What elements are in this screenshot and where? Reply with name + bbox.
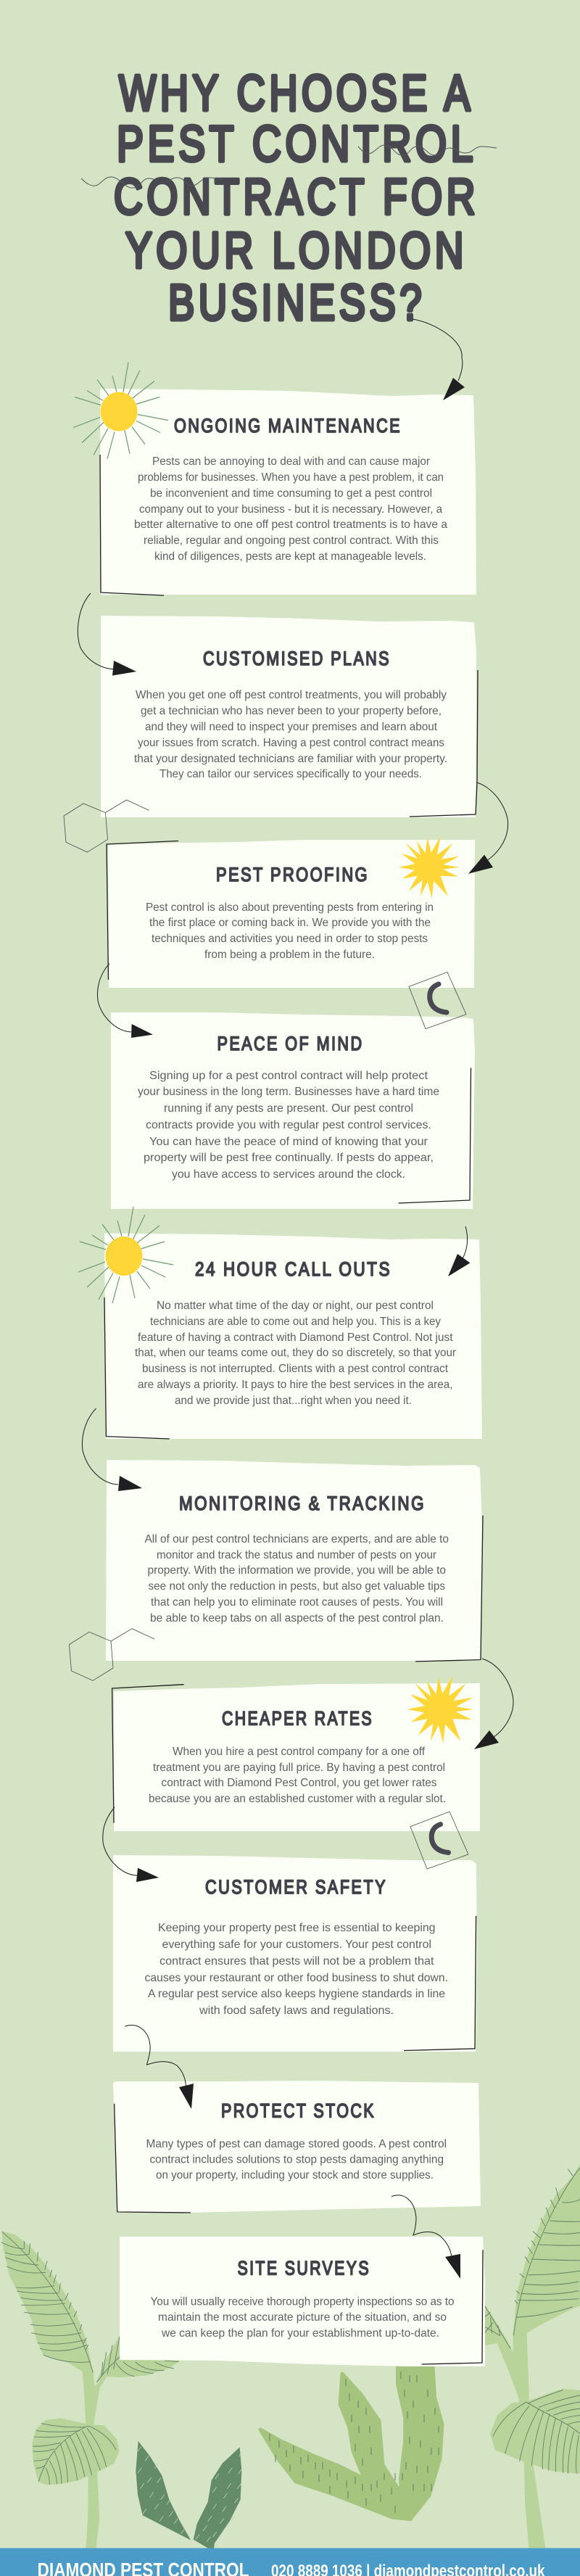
text: customised plans: and they will need to inspect your premises and learn about [145,721,438,733]
icon: tilted square top [409,972,466,1029]
text: 24 hour call outs: business is not interrupted. Clients with a pest control contract [142,1363,449,1375]
heading: cheaper rates: CHEAPER RATES [222,1707,373,1729]
text: pest proofing [146,901,434,961]
icon: sun top [73,363,168,458]
heading: site surveys: SITE SURVEYS [238,2257,370,2279]
text: pest proofing: Pest control is also about preventing pests from entering in [146,901,434,914]
squiggle: title upper [358,145,497,155]
icon: tilted square second [410,1812,468,1869]
arrow: safety to stock [125,2025,194,2109]
icon: starburst second [407,1675,473,1743]
plant: middle light green branch [260,2366,442,2519]
text: protect stock [146,2138,447,2181]
title: PEST CONTROL [117,115,477,172]
text: monitoring and tracking: monitor and track the status and number of pests on your [157,1549,437,1561]
text: peace of mind: You can have the peace of mind of knowing that your [149,1136,428,1148]
text: customised plans [134,689,447,780]
text: customer safety [145,1922,448,2017]
heading: customised plans: CUSTOMISED PLANS [203,648,391,669]
text: protect stock: Many types of pest can damage stored goods. A pest control [146,2138,447,2150]
text: site surveys: we can keep the plan for your establishment up-to-date. [161,2327,439,2340]
text: peace of mind: you have access to services around the clock. [172,1168,405,1181]
panel: customer safety [113,1855,477,2052]
heading: ongoing maintenance: ONGOING MAINTENANCE [174,415,402,437]
arrow: maintenance to plans [78,593,136,676]
text: monitoring and tracking [145,1533,449,1625]
title: WHY CHOOSE A [119,65,474,121]
text: protect stock: contract includes solutions to stop pests damaging anything [149,2154,444,2166]
plant: dark green leaves [136,2441,241,2548]
text: cheaper rates: treatment you are paying full price. By having a pest control [153,1762,445,1774]
text: customised plans: They can tailor our services specifically to your needs. [160,768,422,780]
title: CONTRACT FOR [114,168,479,225]
text: customer safety: causes your restaurant or other food business to shut down. [145,1972,448,1984]
icon: sun second [78,1207,173,1303]
panel: pest proofing [107,840,475,988]
text: customer safety: contract ensures that pests will not be a problem that [160,1955,434,1968]
arrow: call outs to monitoring [82,1408,142,1491]
squiggle: title lower [81,177,222,188]
text: ongoing maintenance [134,455,447,563]
text: monitoring and tracking: property. With the information we provide, you will be able to [148,1564,446,1577]
text: customised plans: When you get one off pest control treatments, you will probably [136,689,447,701]
text: peace of mind: contracts provide you with regular pest control services. [146,1119,431,1131]
panel: protect stock [113,2081,481,2213]
arrow: monitoring to cheaper rates [474,1659,513,1749]
text: 24 hour call outs: and we provide just that...right when you need it. [175,1395,412,1407]
text: peace of mind: Signing up for a pest control contract will help protect [149,1070,428,1082]
text: cheaper rates: because you are an established customer with a regular slot. [149,1793,446,1805]
heading: customer safety: CUSTOMER SAFETY [205,1876,387,1898]
text: customer safety: with food safety laws and regulations. [199,2005,394,2017]
text: peace of mind [138,1070,439,1181]
icon: hexagon top [64,800,149,852]
text: ongoing maintenance: Pests can be annoying to deal with and can cause major [152,455,431,468]
text: pest proofing: from being a problem in the future. [204,949,375,961]
heading: peace of mind: PEACE OF MIND [218,1033,364,1054]
text: monitoring and tracking: that can help you to eliminate root causes of pests. You will [151,1596,443,1609]
text: 24 hour call outs: feature of having a contract with Diamond Pest Control. Not just [138,1332,453,1344]
text: ongoing maintenance: reliable, regular and ongoing pest control contract. With this [144,534,439,547]
text: ongoing maintenance: problems for businesses. When you have a pest problem, it can [138,471,444,484]
text: customer safety: A regular pest service also keeps hygiene standards in line [148,1988,445,2000]
text: site surveys [151,2296,455,2340]
arrow: stock to surveys [392,2195,460,2279]
panel: peace of mind [111,1012,475,1209]
text: customised plans: get a technician who has never been to your property before, [141,705,442,717]
plant: right with striped leaves [484,2165,580,2548]
text: cheaper rates [149,1746,446,1805]
text: customer safety: Keeping your property pest free is essential to keeping [158,1922,435,1934]
plant: left with striped leaves [1,2232,180,2548]
text: site surveys: You will usually receive thorough property inspections so as to [151,2296,455,2308]
text: cheaper rates: When you hire a pest control company for a one off [173,1746,426,1758]
arrow: plans to proofing [468,783,508,874]
text: site surveys: maintain the most accurate picture of the situation, and so [158,2311,447,2324]
title: YOUR LONDON [125,222,468,278]
text: ongoing maintenance: kind of diligences, pests are kept at manageable levels. [154,550,426,563]
title [114,65,479,331]
title: BUSINESS? [168,274,426,331]
text: protect stock: on your property, including your stock and store supplies. [156,2169,434,2181]
text: monitoring and tracking: see not only the reduction in pests, but also get valuable tips [148,1580,445,1593]
arrow: cheaper rates to safety [103,1807,159,1882]
panel: customised plans [101,616,478,817]
text: pest proofing: the first place or coming back in. We provide you with the [149,917,431,929]
text: 24 hour call outs: are always a priority. It pays to hire the best services in the area, [138,1379,452,1391]
heading: pest proofing: PEST PROOFING [216,864,369,886]
text: 24 hour call outs [135,1300,457,1407]
text: pest proofing: techniques and activities you need in order to stop pests [152,933,428,945]
text: 24 hour call outs: that, when our teams come out, they do so discretely, so that your [135,1347,457,1359]
heading: protect stock: PROTECT STOCK [221,2100,376,2122]
panel: 24 hour call outs [104,1233,482,1439]
text: 24 hour call outs: No matter what time of the day or night, our pest control [157,1300,434,1312]
text: ongoing maintenance: be inconvenient and time consuming to get a pest control [150,487,432,500]
panel: cheaper rates [112,1683,480,1831]
icon: hexagon second [69,1629,154,1680]
text: cheaper rates: contract with Diamond Pest Control, you get lower rates [161,1777,436,1789]
text: peace of mind: running if any pests are present. Our pest control [164,1102,413,1115]
text: customised plans: your issues from scratch. Having a pest control contract means [138,737,444,749]
text: customised plans: that your designated technicians are familiar with your property. [134,753,447,765]
arrow: peace of mind to call outs [448,1226,470,1276]
text: peace of mind: property will be pest free continually. If pests do appear, [144,1152,434,1164]
text: 24 hour call outs: technicians are able to come out and help you. This is a key [150,1316,441,1328]
text: ongoing maintenance: company out to your business - but it is necessary. However, a [139,503,442,516]
arrow: title to maintenance [413,319,465,400]
panel: site surveys [120,2237,485,2366]
text: monitoring and tracking: be able to keep tabs on all aspects of the pest control plan. [150,1612,444,1625]
icon: starburst top [399,836,460,899]
arrow: proofing to peace of mind [97,964,153,1038]
panel: monitoring and tracking [106,1460,483,1661]
footer band [0,2548,580,2576]
text: ongoing maintenance: better alternative to one off pest control treatments is to have a [134,519,447,531]
text: monitoring and tracking: All of our pest control technicians are experts, and are able to [145,1533,449,1545]
heading: 24 hour call outs: 24 HOUR CALL OUTS [195,1258,392,1280]
heading: monitoring and tracking: MONITORING & TRACKING [179,1493,426,1514]
panel: ongoing maintenance [100,389,476,595]
text: customer safety: everything safe for your customers. Your pest control [162,1939,431,1951]
text: peace of mind: your business in the long term. Businesses have a hard time [138,1086,439,1098]
